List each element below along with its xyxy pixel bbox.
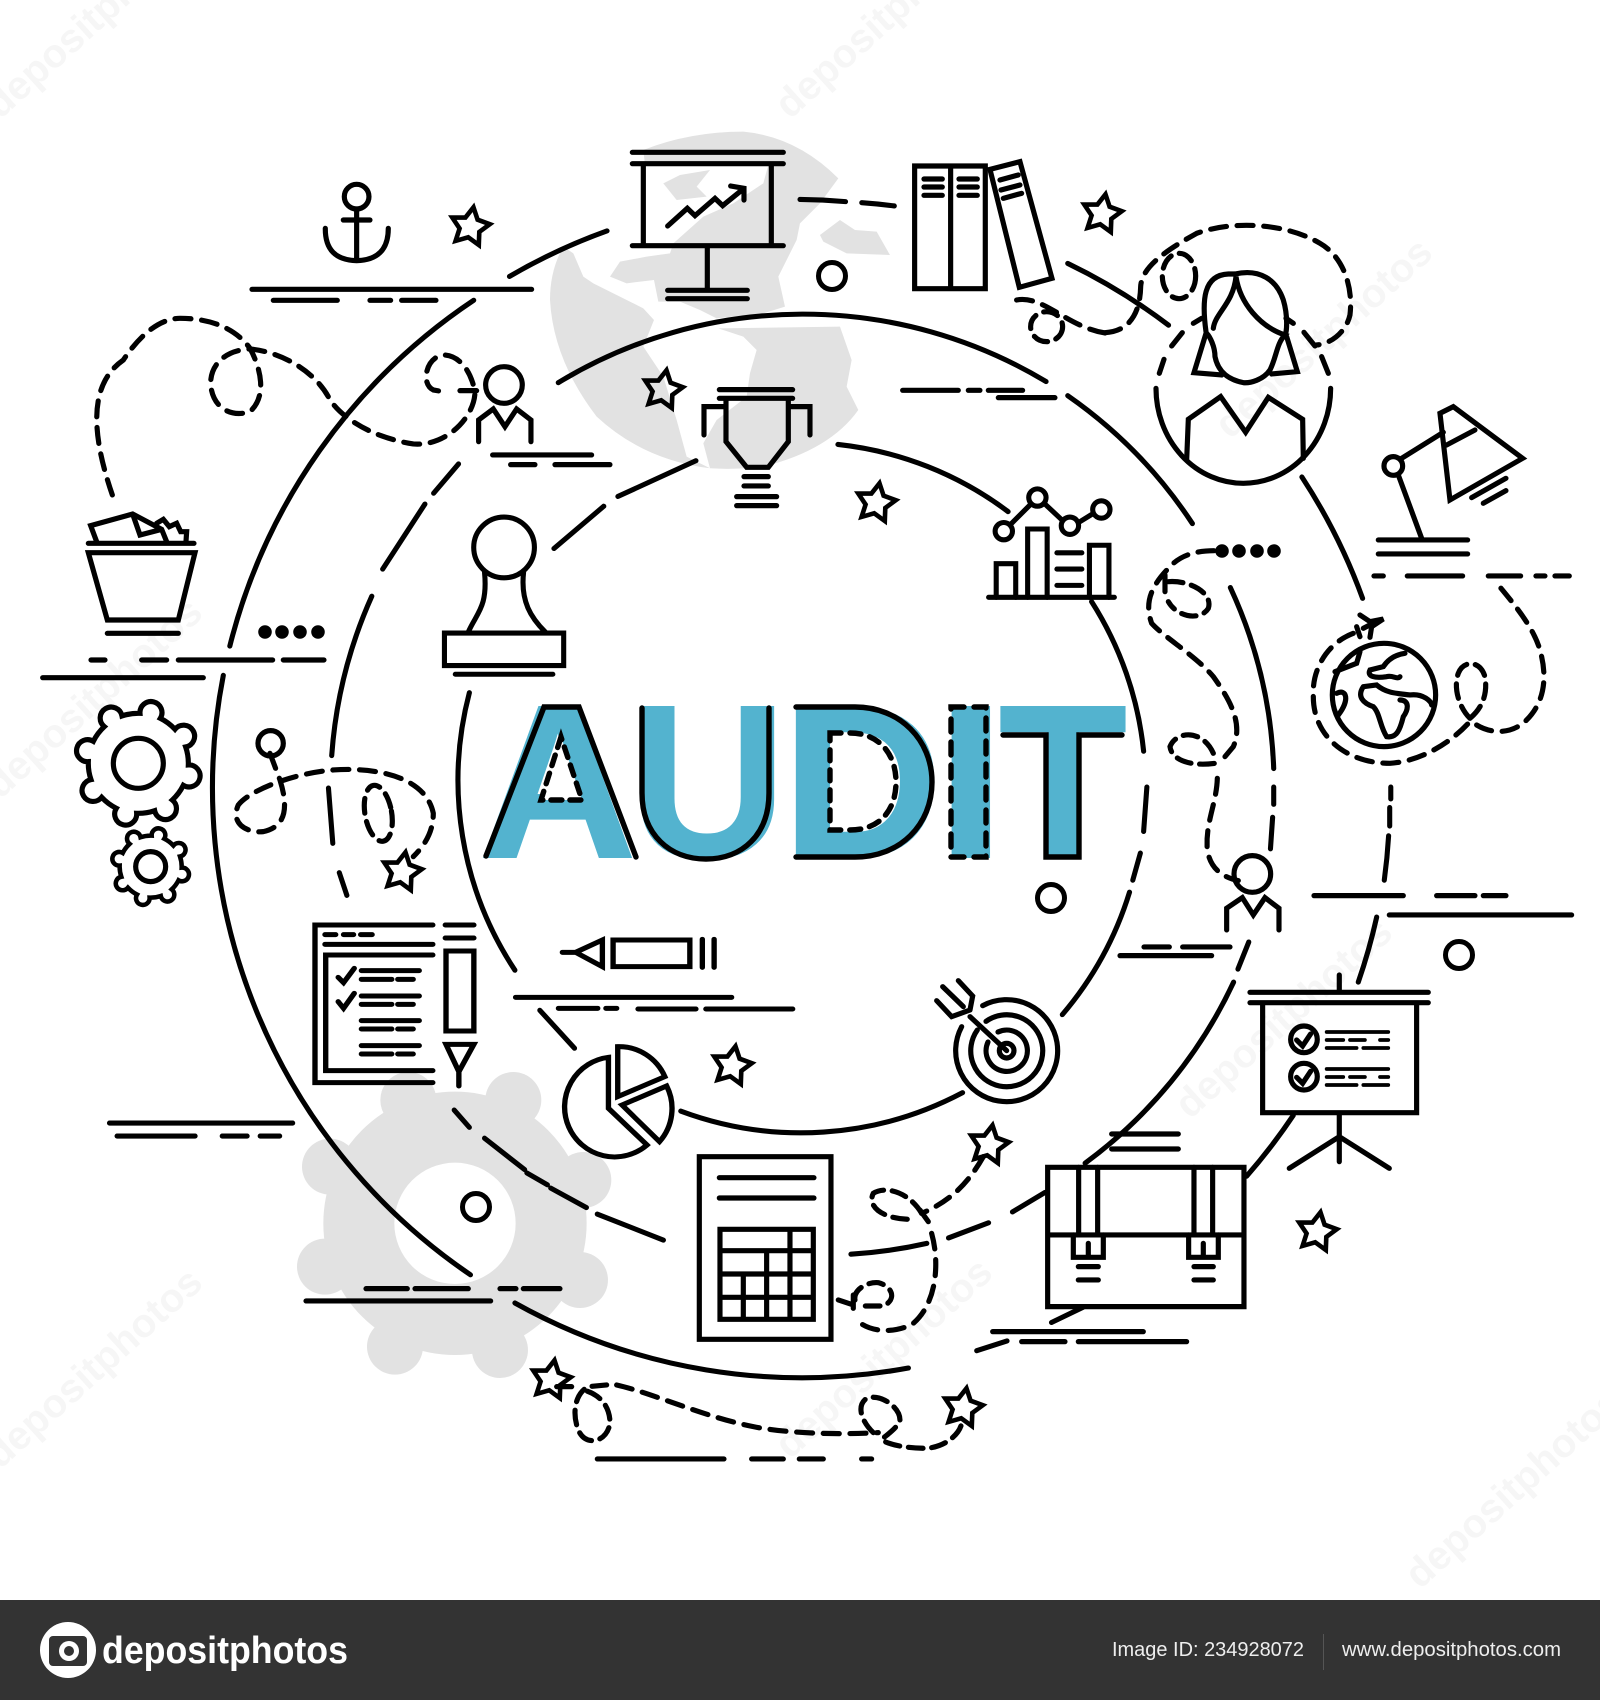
concentric rings: [109, 199, 1391, 1378]
briefcase icon: [993, 1134, 1244, 1342]
dashed path along bottom: [557, 1385, 962, 1459]
pie chart icon: [565, 1047, 672, 1157]
dashed loop around avatar: [1105, 225, 1351, 345]
target with arrow icon: [937, 981, 1058, 1102]
bar and line chart icon: [989, 489, 1114, 597]
dashed lines under gear: [306, 1289, 560, 1301]
bucket with papers icon: [43, 514, 324, 678]
trophy icon: [704, 390, 810, 506]
dashed loop around globe: [1313, 585, 1544, 763]
title: AUDIT: A: [479, 661, 636, 904]
presentation board with rising arrow: [632, 152, 783, 299]
watermarks: depositphotos: [1207, 230, 1441, 447]
dashed path right centre: [1149, 551, 1238, 881]
document checklist and pencil icon: [315, 925, 474, 1086]
earth globe with plane icon: [1332, 615, 1436, 747]
checklist presentation board icon: [1250, 975, 1428, 1168]
title: AUDIT: U: [629, 661, 786, 904]
dashes under top ring: [903, 390, 1055, 398]
middle ring: [328, 314, 1274, 1254]
dashed path near binders: [1017, 299, 1105, 342]
dashed path upper left: [97, 318, 477, 495]
footer divider: [1323, 1634, 1324, 1670]
person icon upper left: [479, 367, 610, 465]
horizontal dashes lower left: [109, 1123, 293, 1136]
stars: [384, 194, 1337, 1426]
gears icon: [77, 702, 200, 905]
dashed path near calculator: [838, 1157, 983, 1330]
footer logo: depositphotos: [102, 1630, 348, 1672]
calculator document icon: [699, 1157, 831, 1339]
footer bar: [0, 1600, 1600, 1700]
title: AUDIT: D: [782, 660, 943, 904]
small open circles: [462, 262, 1472, 1220]
person icon right: [1120, 856, 1279, 956]
dashes lower right: [1314, 896, 1572, 915]
outer ring: [212, 199, 1391, 1378]
title: AUDIT: I: [936, 659, 1006, 903]
woman avatar icon: [1156, 273, 1331, 483]
binders icon: [915, 162, 1052, 289]
desk lamp icon: [1374, 407, 1569, 576]
grey world map background: [550, 132, 890, 469]
inner ring: [458, 444, 1147, 1133]
grey gear background: [297, 1072, 611, 1378]
pin and dashed path left: [236, 731, 433, 857]
footer website: www.depositphotos.com: [1341, 1639, 1561, 1661]
footer logo: [40, 1622, 348, 1678]
four dots left: [258, 625, 325, 639]
title outline accents: [486, 707, 1122, 859]
anchor icon: [252, 184, 532, 300]
watermarks: depositphotos: [767, 1250, 1001, 1467]
stamp icon: [444, 517, 564, 674]
four dots right: [1215, 544, 1281, 558]
footer image id: Image ID: 234928072: [1112, 1639, 1304, 1661]
pen icon: [516, 939, 793, 1009]
title: AUDIT: [479, 659, 1127, 904]
title: AUDIT: T: [999, 661, 1127, 904]
watermarks: depositphotos: [1167, 910, 1401, 1127]
